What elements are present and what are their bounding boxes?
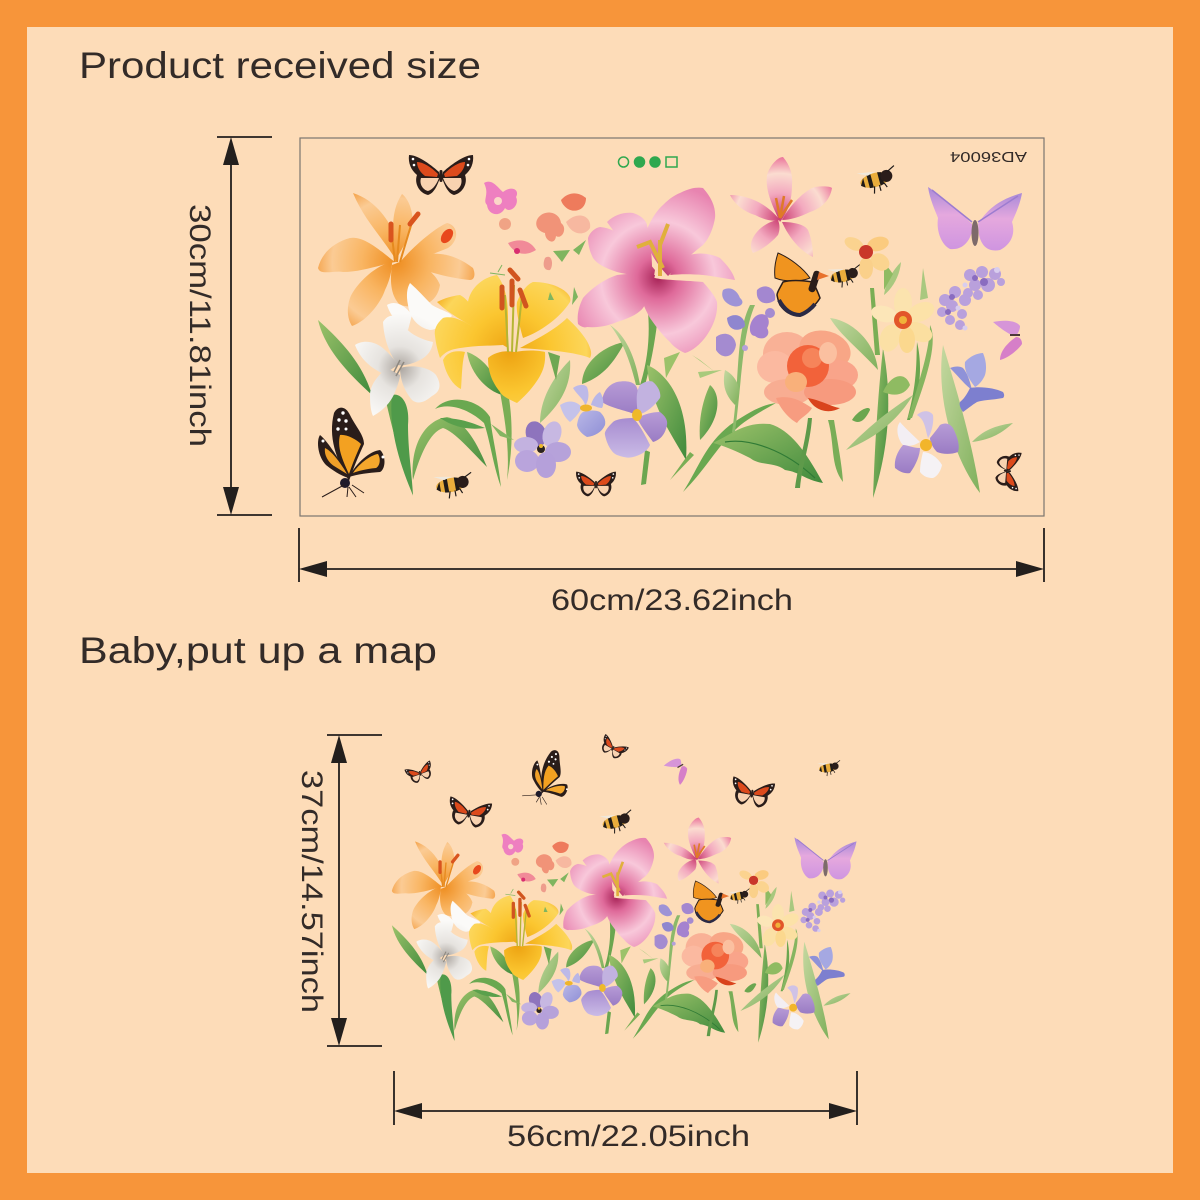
dimension: decal width — [394, 1071, 857, 1153]
dimension: decal height — [295, 735, 382, 1046]
care icons — [618, 157, 677, 167]
dimension: decal height: 37cm/14.57inch — [295, 770, 328, 1013]
dimension: sheet height — [183, 137, 272, 515]
butterflies and bees on sheet — [318, 155, 1022, 501]
flower illustration — [318, 157, 1022, 498]
butterflies and bees above flowers — [404, 734, 842, 836]
dimension: decal width: 56cm/22.05inch — [507, 1120, 750, 1153]
flower illustration scaled — [392, 818, 857, 1043]
dimension: sheet height: 30cm/11.81inch — [183, 204, 216, 447]
dimension: sheet width — [299, 528, 1044, 617]
mirrored product code: AD36004 — [950, 148, 1027, 165]
heading: baby, put up a map: Baby,put up a map — [79, 630, 437, 671]
heading: product received size: Product received size — [79, 45, 481, 86]
dimension: sheet width: 60cm/23.62inch — [551, 584, 793, 617]
panel: applied wall decal — [392, 734, 857, 1043]
sheet outline — [300, 138, 1044, 516]
panel: product sheet — [300, 138, 1044, 516]
